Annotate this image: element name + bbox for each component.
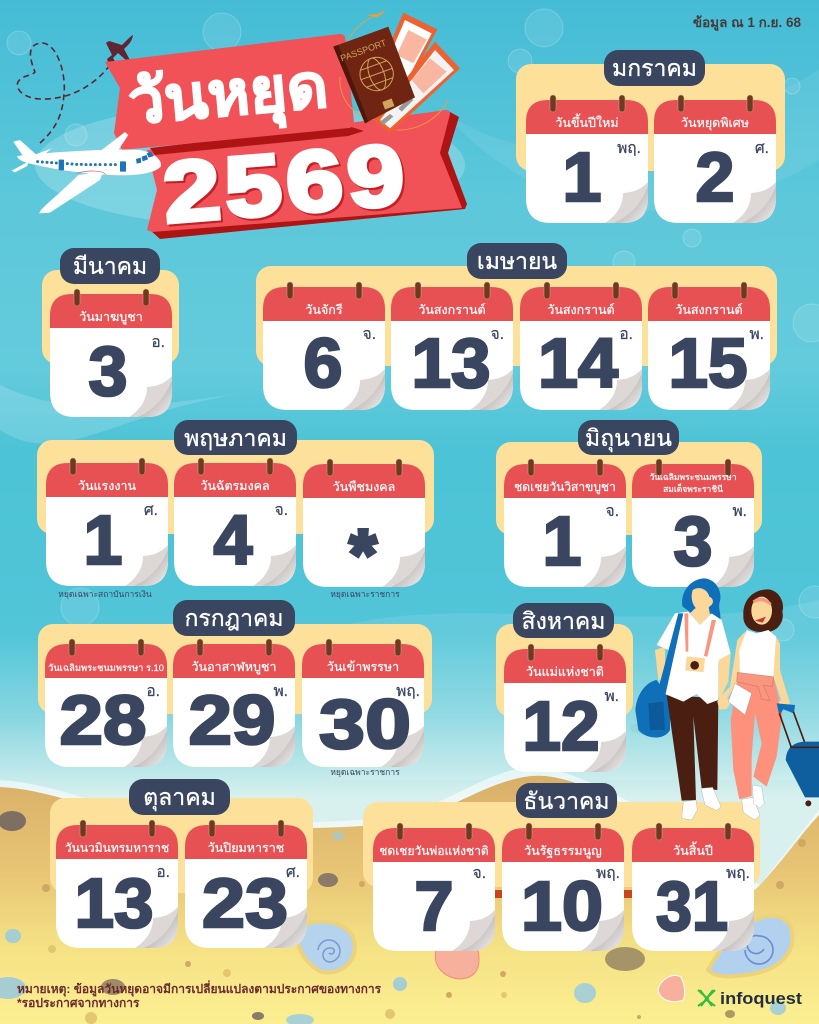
calendar: 3 อ. [50,289,172,417]
title banner [12,10,467,243]
title banner shadow [150,125,364,155]
panel background [37,440,434,534]
panel: สิงหาคม [496,603,633,772]
year text shadow: 2569 [162,128,409,243]
panel background [363,802,760,887]
calendar: 3 อ.: วันมาฆบูชา [79,310,143,325]
calendar: 3 พ. [632,459,754,587]
panel background [50,798,313,893]
heading: ตุลาคม [129,779,230,815]
heading: มกราคม: มกราคม [612,55,697,81]
heading: สิงหาคม: สิงหาคม [522,608,605,634]
title ribbon [105,34,354,150]
background: bubbles [7,9,819,641]
calendar: 14 อ.: 14 [538,324,618,402]
calendar: 31 พฤ.: วันสิ้นปี [673,841,713,858]
calendar: 6 จ. [263,282,385,410]
calendar: 12 พ.: 12 [522,687,600,765]
calendar: 1 จ. [504,459,626,587]
panel: กรกฎาคม [38,600,432,778]
heading: ตุลาคม: ตุลาคม [143,784,216,811]
calendar: 31 พฤ. [632,823,754,951]
calendar: 3 พ.: สมเด็จพระราชินี [663,483,723,494]
calendar: 15 พ.: 15 [668,324,748,402]
calendar: 12 พ. [504,644,626,772]
panel: พฤษภาคม [37,420,434,600]
calendar: 30 พฤ.: วันเข้าพรรษา [327,660,399,674]
year text: 2569 [160,126,407,241]
calendar: 28 อ.: 28 [60,681,146,759]
footnote: *รอประกาศจากทางการ [17,996,140,1010]
heading: เมษายน: เมษายน [477,248,557,274]
calendar: 30 พฤ.: พฤ. [396,683,420,700]
icon: dark plane [106,35,133,63]
calendar: 1 จ.: จ. [606,503,619,520]
calendar: 6 จ.: จ. [363,326,376,343]
panel: ธันวาคม [363,783,760,951]
footnote [17,980,382,1010]
icon: pink shell middle [435,950,479,979]
year banner [147,110,462,232]
suitcase [777,703,819,806]
calendar: 13 อ.: อ. [156,864,170,881]
calendar: 3 พ.: พ. [732,503,747,520]
calendar: 28 อ. [45,639,167,767]
calendar: 3 อ.: อ. [151,334,165,351]
calendar: 23 ศ.: 23 [202,864,288,942]
calendar: 7 จ.: 7 [415,867,453,945]
calendar: 13 อ. [56,820,178,948]
calendar: 13 อ.: วันนวมินทรมหาราช [65,841,169,855]
icon: spiral shell right [708,916,793,976]
heading: มีนาคม: มีนาคม [73,253,147,279]
calendar: 14 อ.: อ. [619,326,633,343]
calendar: 2 ศ. [654,95,776,223]
calendar: 1 พฤ. [526,95,648,223]
calendar: 2 ศ.: ศ. [755,140,769,157]
heading: เมษายน [467,243,567,279]
calendar: 15 พ.: วันสงกรานต์ [675,303,743,317]
year banner shadow [150,112,467,239]
heading: ธันวาคม: ธันวาคม [523,788,610,814]
panel background [256,266,777,366]
calendar: 1 จ.: 1 [543,502,581,580]
calendar: *: วันพืชมงคล [333,480,395,494]
background: light waves [0,70,819,780]
calendar: 28 อ.: อ. [146,683,160,700]
calendar: 23 ศ. [185,820,307,948]
calendar: 13 จ.: วันสงกรานต์ [418,303,486,317]
panel background [42,270,179,364]
footnote: หมายเหตุ: ข้อมูลวันหยุดอาจมีการเปลี่ยนแปลงตามประกาศของทางการ [17,980,382,997]
heading: กรกฎาคม [173,600,295,636]
calendar: 29 พ.: พ. [273,683,288,700]
calendar: *: * [349,515,377,593]
calendar: 13 จ.: 13 [412,324,490,402]
panel background [516,64,785,171]
panel: มีนาคม [42,248,179,417]
calendar: 6 จ.: 6 [304,324,342,402]
panel background [496,624,633,717]
calendar: 3 พ.: วันเฉลิมพระชนมพรรษา [649,472,737,482]
heading: พฤษภาคม: พฤษภาคม [184,425,287,451]
calendar: 6 จ.: วันจักรี [305,303,343,317]
illustration: travelling couple [630,578,819,820]
icon: tickets and passport: PASSPORT [339,37,388,63]
icon: pink shell right [658,975,685,1002]
calendar: 29 พ.: 29 [188,681,276,759]
calendar: 31 พฤ.: 31 [656,867,728,945]
calendar: 1 ศ.: ศ. [144,502,158,519]
calendar: 10 พฤ.: 10 [521,867,603,945]
calendar: 13 จ.: จ. [491,326,504,343]
calendar: 1 พฤ.: วันขึ้นปีใหม่ [555,113,619,130]
date note: ข้อมูล ณ 1 ก.ย. 68 [693,15,801,31]
calendar: 12 พ.: วันแม่แห่งชาติ [526,665,604,679]
flight path [17,43,110,143]
heading: มกราคม [604,50,705,86]
calendar: 1 พฤ.: 1 [563,138,601,216]
calendar: 1 พฤ.: พฤ. [617,140,641,157]
panel background [38,624,432,714]
heading: กรกฎาคม: กรกฎาคม [184,605,284,631]
panel background [496,442,762,535]
calendar: 30 พฤ.: 30 [319,685,411,763]
calendar: 12 พ.: พ. [604,688,619,705]
calendar: 15 พ.: พ. [749,326,764,343]
beach decorations [0,811,806,1024]
calendar: 13 จ. [391,282,513,410]
calendar: 23 ศ.: ศ. [286,864,300,881]
panel: มิถุนายน [496,420,762,587]
calendar: 10 พฤ.: วันรัฐธรรมนูญ [524,844,602,859]
icon: white airplane [12,132,161,213]
logo: infoquest: infoquest [720,989,802,1008]
calendar: 4 จ. [174,458,296,586]
title text: วันหยุด [126,51,331,141]
calendar: 31 พฤ.: พฤ. [726,865,750,882]
calendar: 23 ศ.: วันปิยมหาราช [208,841,284,855]
icon: tickets and passport [333,10,460,133]
woman [719,589,790,820]
calendar: * [303,459,425,593]
calendar: 29 พ.: วันอาสาฬหบูชา [192,660,276,675]
icon: logo mark [698,990,715,1006]
note: financial institutions: หยุดเฉพาะสถาบันการเงิน [58,589,152,600]
note: government: หยุดเฉพาะราชการ [330,767,400,778]
icon: red shell behind December calendars [490,890,636,898]
calendar: 14 อ.: วันสงกรานต์ [547,303,615,317]
icon: spiral shell left [296,922,355,972]
background: foam [0,767,819,1024]
panel: ตุลาคม [50,779,313,948]
calendar: 29 พ. [173,639,295,767]
calendar: 1 ศ.: วันแรงงาน [78,479,137,493]
calendar: 1 ศ. [46,458,168,586]
background: sand [0,776,819,1024]
calendar: 14 อ. [520,282,642,410]
calendar: 2 ศ.: วันหยุดพิเศษ [681,116,749,131]
calendar: 30 พฤ. [302,639,424,767]
calendar: 3 อ.: 3 [89,332,127,410]
calendar: 7 จ.: ชดเชยวันพ่อแห่งชาติ [379,844,489,858]
calendar: 4 จ.: วันฉัตรมงคล [200,479,270,493]
panel: มกราคม [516,50,785,223]
calendar: 10 พฤ.: พฤ. [596,865,620,882]
heading: ธันวาคม [516,783,617,818]
calendar: 3 พ.: 3 [674,502,712,580]
calendar: 28 อ.: วันเฉลิมพระชนมพรรษา ร.10 [48,663,164,673]
calendar: 13 อ.: 13 [74,864,154,942]
heading: พฤษภาคม [174,420,297,455]
heading: มิถุนายน: มิถุนายน [585,425,672,452]
note: government: หยุดเฉพาะราชการ [330,589,400,600]
calendar: 4 จ.: 4 [214,501,253,579]
panel: เมษายน [256,243,777,410]
calendar: 7 จ.: จ. [473,865,486,882]
calendar: 1 จ.: ชดเชยวันวิสาขบูชา [514,480,616,495]
calendar: 4 จ.: จ. [275,502,288,519]
heading: มิถุนายน [578,420,679,455]
calendar: 1 ศ.: 1 [84,501,122,579]
man [630,578,731,820]
calendar: 2 ศ.: 2 [696,138,734,216]
heading: สิงหาคม [513,603,614,638]
calendar: 10 พฤ. [502,823,624,951]
heading: มีนาคม [60,248,160,284]
calendar: 7 จ. [373,823,495,951]
calendar: 15 พ. [648,282,770,410]
